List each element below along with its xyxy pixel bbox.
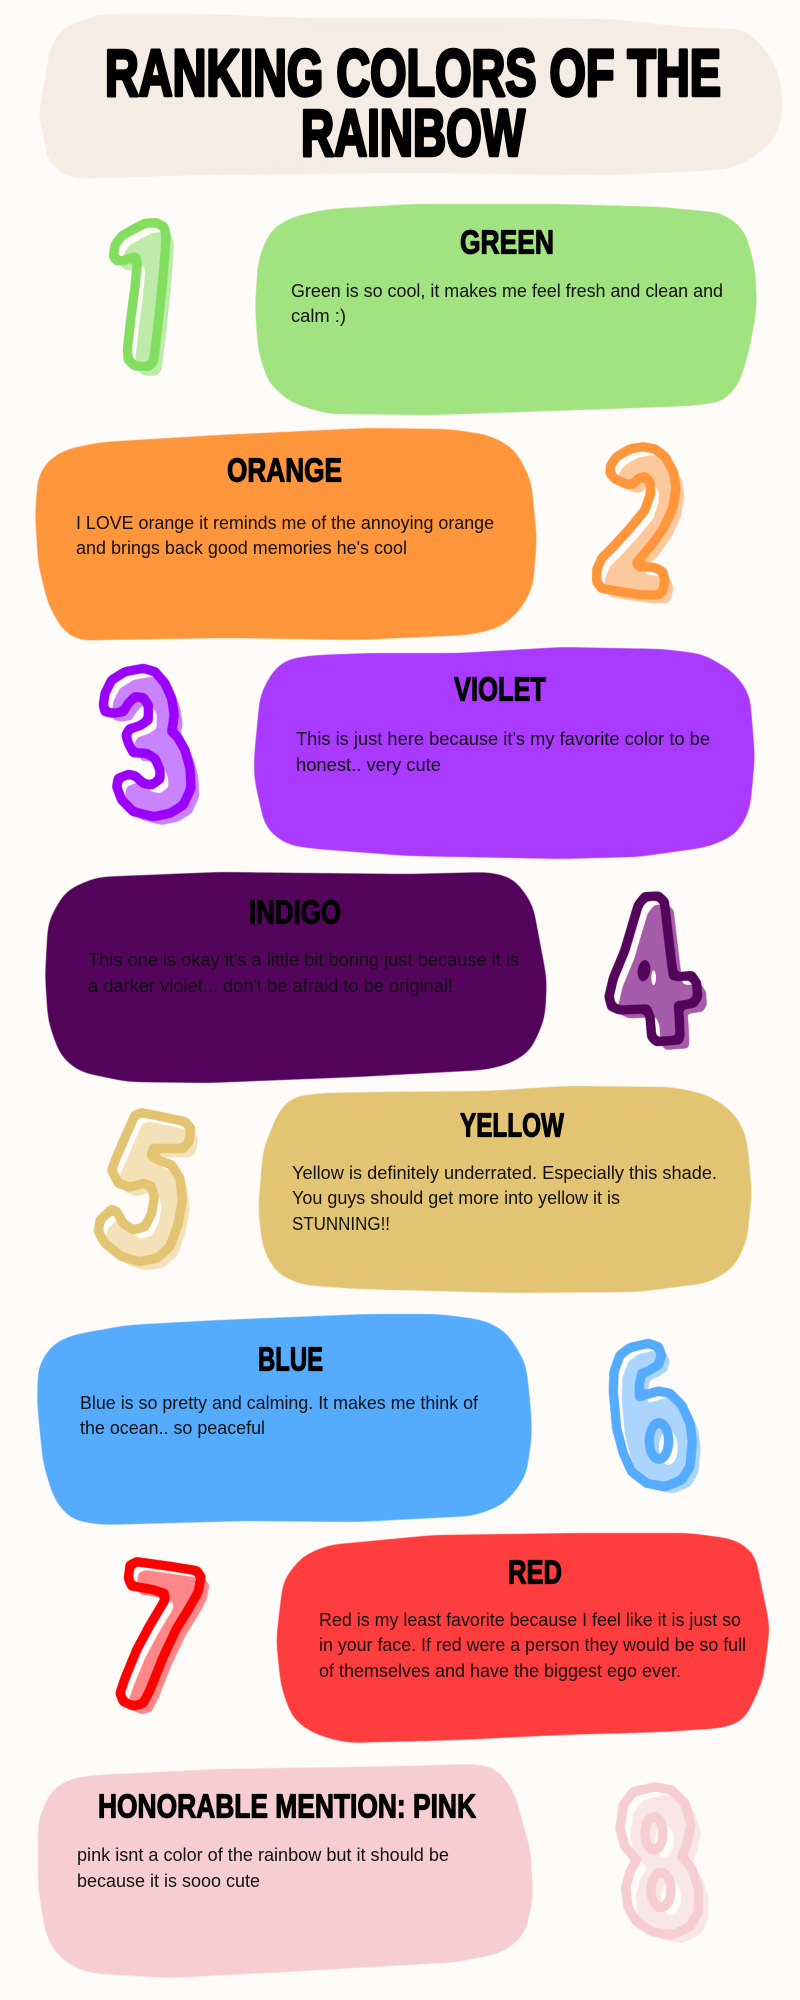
- text: violet: This is just here because it's my favorite color to be: [296, 728, 710, 749]
- number 4: [609, 896, 707, 1050]
- text: blue: Blue is so pretty and calming. It makes me think of: [80, 1392, 479, 1413]
- text: blue: the ocean.. so peaceful: [80, 1417, 265, 1438]
- heading: red: RED: [508, 1553, 562, 1590]
- heading: orange: ORANGE: [227, 451, 342, 488]
- text: red: [319, 1609, 746, 1681]
- panel: orange: [37, 430, 535, 639]
- text: indigo: a darker violet... don't be afraid to be original!: [88, 975, 453, 996]
- text: violet: honest.. very cute: [296, 754, 441, 775]
- heading: honorable mention pink: HONORABLE MENTION: PINK: [98, 1787, 476, 1824]
- text: red: Red is my least favorite because I feel like it is just so: [319, 1609, 741, 1630]
- text: green: calm :): [291, 305, 346, 326]
- text: orange: I LOVE orange it reminds me of the annoying orange: [76, 512, 494, 533]
- number 5: [98, 1113, 198, 1271]
- title banner: [40, 16, 781, 177]
- text: orange: and brings back good memories he's cool: [76, 537, 407, 558]
- panel: indigo: [47, 874, 545, 1081]
- title text: [105, 36, 721, 170]
- text: red: in your face. If red were a person they would be so full: [319, 1634, 746, 1655]
- text: yellow: You guys should get more into yellow it is: [292, 1187, 620, 1208]
- number 7: [120, 1562, 209, 1714]
- text: blue: [80, 1392, 479, 1438]
- text: yellow: [292, 1162, 717, 1234]
- text: pink: pink isnt a color of the rainbow but it should be: [77, 1844, 449, 1865]
- panel: violet: [256, 649, 753, 857]
- text: pink: because it is sooo cute: [77, 1870, 260, 1891]
- text: violet: [296, 728, 710, 775]
- number 2: [597, 447, 684, 603]
- text: pink: [77, 1844, 449, 1891]
- heading: blue: BLUE: [258, 1340, 323, 1377]
- heading: violet: VIOLET: [454, 670, 546, 707]
- text: indigo: This one is okay it's a little bit boring just because it is: [88, 949, 519, 970]
- panel: blue: [39, 1316, 530, 1523]
- text: indigo: [88, 949, 519, 996]
- text: green: Green is so cool, it makes me feel fresh and clean and: [291, 280, 723, 301]
- panel: honorable mention pink: [40, 1766, 531, 1976]
- panel: yellow: [260, 1088, 750, 1291]
- panel: red: [278, 1535, 768, 1741]
- text: yellow: Yellow is definitely underrated. Especially this shade.: [292, 1162, 717, 1183]
- number 6: [613, 1343, 701, 1493]
- number 8: [620, 1787, 708, 1943]
- text: red: of themselves and have the biggest ego ever.: [319, 1660, 681, 1681]
- number 3: [103, 668, 199, 825]
- number 1: [113, 223, 174, 376]
- title text: RAINBOW: [301, 96, 525, 170]
- heading: green: GREEN: [460, 223, 554, 260]
- panel: green: [257, 206, 755, 413]
- heading: indigo: INDIGO: [249, 893, 341, 930]
- text: yellow: STUNNING!!: [292, 1213, 390, 1234]
- heading: yellow: YELLOW: [460, 1106, 565, 1143]
- text: orange: [76, 512, 494, 558]
- text: green: [291, 280, 723, 326]
